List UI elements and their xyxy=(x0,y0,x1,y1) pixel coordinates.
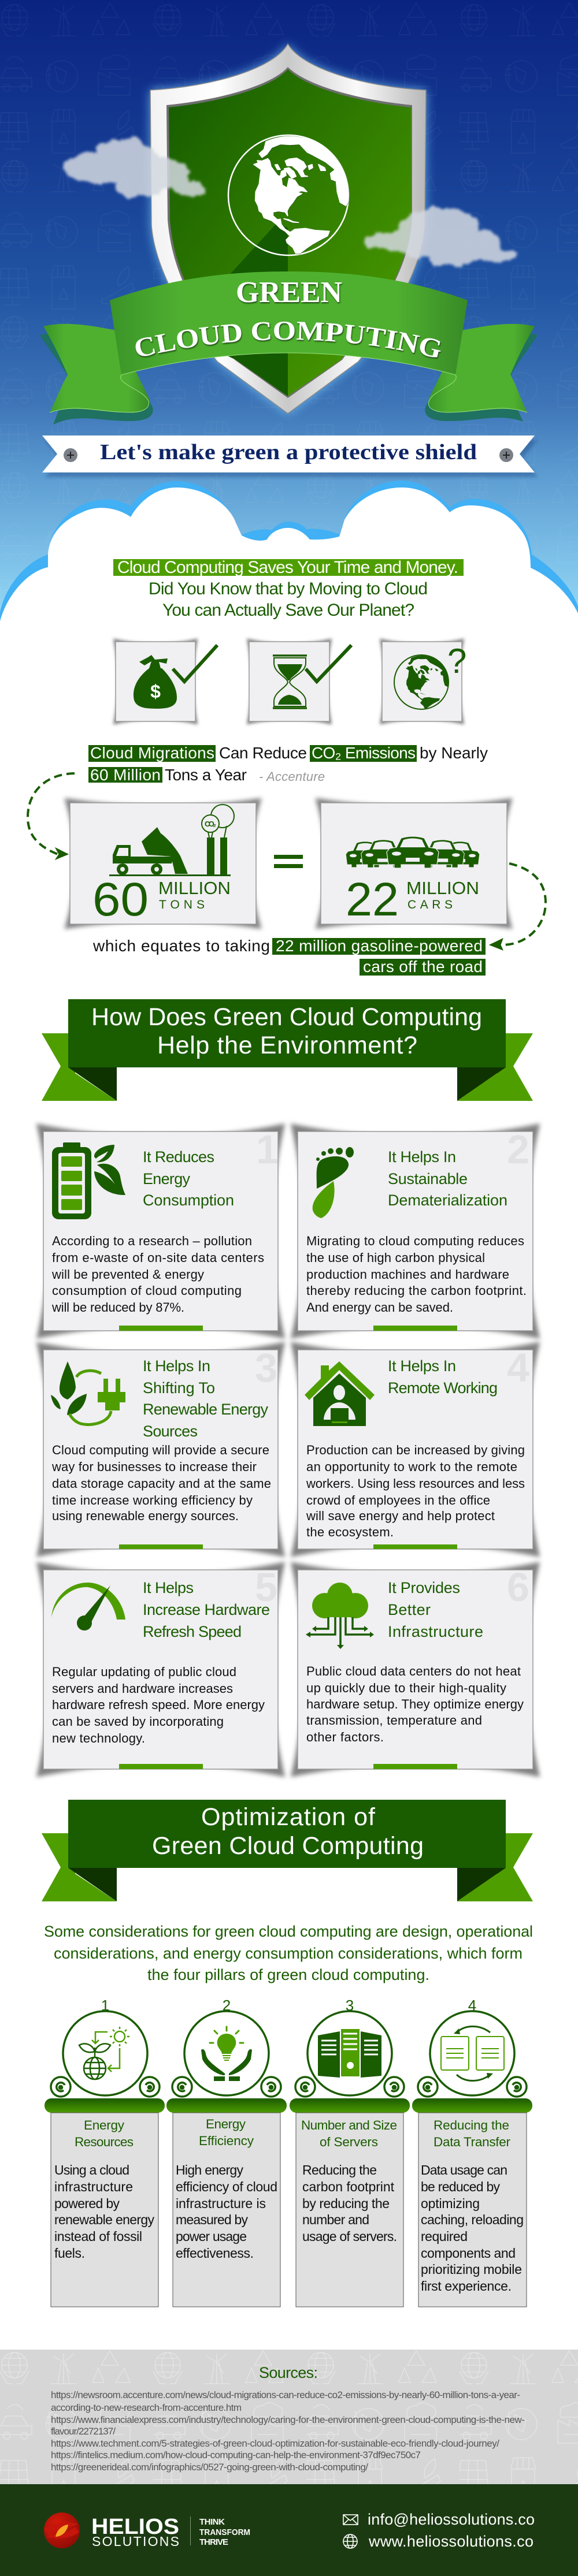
panel: card 5 xyxy=(36,1562,285,1777)
right cloud xyxy=(365,207,517,266)
pillar body: be reduced by xyxy=(421,2179,501,2194)
ribbon right tail xyxy=(425,324,538,422)
card title: It Reduces xyxy=(143,1148,214,1166)
pillar body: optimizing xyxy=(421,2196,480,2211)
pillar title xyxy=(433,2118,511,2149)
card body: data storage capacity and at the same xyxy=(52,1476,271,1491)
pillar body: prioritizing mobile xyxy=(421,2262,522,2277)
pillar 3: 3 xyxy=(346,1997,354,2014)
card body: can be saved by incorporating xyxy=(52,1714,224,1729)
icon: battery with leaves xyxy=(52,1142,125,1219)
card body: hardware refresh speed. More energy xyxy=(52,1698,265,1712)
panel: card 4 xyxy=(291,1342,540,1557)
pillar body: efficiency of cloud xyxy=(176,2179,277,2194)
stat text xyxy=(346,873,479,926)
banner text: Let's make green a protective shield xyxy=(100,440,477,464)
pillar 1: 1 xyxy=(101,1997,109,2014)
pillar body: Data usage can xyxy=(421,2162,507,2177)
intro paragraph: the four pillars of green cloud computing. xyxy=(147,1966,429,1983)
card title: Remote Working xyxy=(388,1379,498,1397)
pillar title: of Servers xyxy=(320,2135,378,2149)
ribbon left tail xyxy=(40,324,153,425)
card title xyxy=(388,1579,483,1640)
logo wordmark xyxy=(91,2515,250,2549)
card title xyxy=(143,1579,270,1640)
pillar body: number and xyxy=(302,2212,369,2227)
equates text: which equates to taking xyxy=(92,937,270,955)
icon: cars xyxy=(346,836,480,868)
card title: It Helps In xyxy=(143,1357,210,1375)
equates text: 22 million gasoline-powered xyxy=(276,937,483,955)
card title xyxy=(388,1357,498,1397)
pillar body: fuels. xyxy=(54,2246,85,2261)
panel: card 3 xyxy=(36,1342,285,1557)
card body: Public cloud data centers do not heat xyxy=(306,1664,521,1678)
panel: card 5: 5 xyxy=(255,1565,277,1610)
panel: 60 million tons xyxy=(64,798,262,929)
card title: Renewable Energy xyxy=(143,1401,268,1418)
card body: Production can be increased by giving xyxy=(306,1443,525,1457)
sources list: https://newsroom.accenture.com/news/cloud-migrations-can-reduce-co2-emissions-by-nearly-60-million-tons-a-year- xyxy=(51,2389,520,2400)
heading: optimization: Optimization of xyxy=(201,1803,376,1831)
card title: It Helps xyxy=(143,1579,194,1596)
pillar body: High energy xyxy=(176,2162,244,2177)
pillar body xyxy=(421,2162,524,2294)
icon: footprint leaf xyxy=(313,1147,354,1218)
logo wordmark: TRANSFORM xyxy=(199,2527,250,2537)
card body: According to a research – pollution xyxy=(52,1234,252,1248)
card body: consumption of cloud computing xyxy=(52,1283,242,1298)
panel: card 2 xyxy=(291,1123,540,1339)
card title: Better xyxy=(388,1601,431,1618)
pillar title: Energy xyxy=(206,2117,246,2131)
pillar title xyxy=(301,2118,397,2149)
icon: truck and smokestacks xyxy=(109,805,234,876)
stat text xyxy=(92,873,231,926)
panel: 22 million cars xyxy=(315,798,513,929)
card body: using renewable energy sources. xyxy=(52,1509,239,1523)
card title: It Provides xyxy=(388,1579,460,1596)
equates text: cars off the road xyxy=(363,958,483,976)
heading: how does green cloud computing help: How Does Green Cloud Computing xyxy=(91,1003,482,1031)
card title: Infrastructure xyxy=(388,1623,483,1640)
cloud migrations text: by Nearly xyxy=(420,744,488,762)
panel: sources xyxy=(0,2350,578,2484)
pillar body: carbon footprint xyxy=(302,2179,395,2194)
sources list: https://www.financialexpress.com/industry/technology/caring-for-the-environment-green-cloud-computing-is-the-new- xyxy=(51,2414,525,2425)
panel: money icon: $ xyxy=(150,681,161,702)
card body xyxy=(306,1664,524,1744)
panel: card 6: 6 xyxy=(507,1565,529,1610)
icon: email xyxy=(343,2515,358,2525)
card body: from e-waste of on-site data centers xyxy=(52,1250,264,1265)
pillar body: components and xyxy=(421,2246,516,2261)
card body: Migrating to cloud computing reduces xyxy=(306,1234,524,1248)
card body: will save energy and help protect xyxy=(306,1509,495,1523)
pillar body: infrastructure xyxy=(54,2179,133,2194)
card title: Energy xyxy=(143,1170,191,1188)
card body: way for businesses to increase their xyxy=(51,1460,257,1474)
card body: other factors. xyxy=(306,1730,384,1744)
sources list: https://fintelics.medium.com/how-cloud-computing-can-help-the-environment-37df9ec750c7 xyxy=(51,2450,421,2460)
card title: Shifting To xyxy=(143,1379,215,1397)
card body: servers and hardware increases xyxy=(52,1681,233,1696)
pillar title xyxy=(199,2117,254,2148)
shield xyxy=(150,44,426,414)
pillar 1 xyxy=(45,1997,165,2307)
stat text: CARS xyxy=(407,898,453,911)
pillar body xyxy=(54,2162,155,2261)
pillar title: Energy xyxy=(84,2118,125,2132)
icon: plant globe and sun xyxy=(79,2027,129,2079)
card body xyxy=(52,1665,265,1745)
card body: thereby reducing the carbon footprint. xyxy=(306,1283,527,1298)
card title: Sources xyxy=(143,1423,198,1440)
cloud migrations text: Tons a Year xyxy=(165,766,247,784)
pillar title: Reducing the xyxy=(433,2118,509,2132)
icon: cloud infrastructure xyxy=(306,1583,374,1649)
cloud migrations text: Can Reduce xyxy=(219,744,307,762)
card body: the use of high carbon physical xyxy=(306,1250,485,1265)
arrow: to 60 million box xyxy=(28,773,75,859)
pillar title: Number and Size xyxy=(301,2118,397,2132)
pillar title: Resources xyxy=(75,2135,134,2149)
icon: truck and smokestacks: CO₂ xyxy=(205,820,216,828)
left cloud xyxy=(64,139,204,198)
panel: planet question icon: ? xyxy=(447,642,466,680)
pillar body: instead of fossil xyxy=(54,2229,142,2244)
pillar body: required xyxy=(421,2229,468,2244)
pillar body: by reducing the xyxy=(302,2196,390,2211)
panel: hourglass icon xyxy=(247,638,351,725)
card title: Increase Hardware xyxy=(143,1601,270,1618)
cloud migrations text: CO₂ Emissions xyxy=(312,744,416,762)
card body: And energy can be saved. xyxy=(306,1300,453,1315)
logo wordmark: HELIOS xyxy=(91,2515,179,2539)
card body: workers. Using less resources and less xyxy=(306,1476,525,1491)
pillar body: first experience. xyxy=(421,2279,512,2294)
intro text: Did You Know that by Moving to Cloud xyxy=(149,579,428,598)
sources list: https://greenerideal.com/infographics/0527-going-green-with-cloud-computing/ xyxy=(51,2462,368,2473)
pillar body: renewable energy xyxy=(54,2212,155,2227)
icon: hands and light bulb xyxy=(201,2027,252,2081)
pillar 4: 4 xyxy=(468,1997,476,2014)
icon: screw left xyxy=(64,448,77,462)
card body: crowd of employees in the office xyxy=(306,1493,490,1507)
panel: card 1: 1 xyxy=(256,1127,279,1172)
card body xyxy=(51,1234,264,1315)
hero sky background xyxy=(0,0,578,635)
intro paragraph: Some considerations for green cloud computing are design, operational xyxy=(44,1923,533,1940)
footer xyxy=(0,2484,578,2576)
pillar body xyxy=(176,2162,277,2261)
sources list: flavour/2272137/ xyxy=(51,2426,116,2437)
stat text: 60 xyxy=(92,873,149,926)
card body: up quickly due to their high-quality xyxy=(306,1681,506,1695)
card title: It Helps In xyxy=(388,1357,456,1375)
cloud migrations text: Cloud Migrations xyxy=(90,744,214,762)
intro text: Cloud Computing Saves Your Time and Money. xyxy=(117,558,458,577)
card title: Dematerialization xyxy=(388,1192,507,1209)
cloud migrations text xyxy=(88,744,488,784)
email address: info@heliossolutions.co xyxy=(368,2511,535,2528)
intro text: You can Actually Save Our Planet? xyxy=(162,601,414,620)
pillar body: power usage xyxy=(176,2229,247,2244)
card body: Cloud computing will provide a secure xyxy=(52,1443,269,1457)
intro paragraph: considerations, and energy consumption considerations, which form xyxy=(54,1945,523,1962)
heading: how does green cloud computing help: Help the Environment? xyxy=(157,1032,417,1059)
panel: money icon xyxy=(113,638,217,725)
pillar body: effectiveness. xyxy=(176,2246,254,2261)
pillar body xyxy=(302,2162,397,2244)
main ribbon xyxy=(50,271,527,412)
pillar title: Efficiency xyxy=(199,2134,254,2148)
card title xyxy=(388,1148,507,1209)
icon: remote work house xyxy=(305,1361,375,1426)
card body: transmission, temperature and xyxy=(306,1713,482,1728)
pillar body: infrastructure is xyxy=(176,2196,266,2211)
panel: card 3: 3 xyxy=(255,1345,277,1390)
card body: hardware setup. They optimize energy xyxy=(306,1697,524,1711)
card title: Refresh Speed xyxy=(143,1623,242,1640)
card body: Regular updating of public cloud xyxy=(52,1665,236,1679)
card body: will be reduced by 87%. xyxy=(51,1300,184,1315)
logo wordmark: THRIVE xyxy=(199,2537,228,2547)
stat text: 22 xyxy=(346,873,399,926)
icon: renewable plug xyxy=(51,1361,125,1424)
logo wordmark: THINK xyxy=(199,2517,225,2527)
intro paragraph xyxy=(44,1923,533,1983)
panel: card 6 xyxy=(291,1562,540,1777)
panel: planet question icon xyxy=(380,638,466,725)
panel: card 4: 4 xyxy=(507,1345,529,1390)
panel: card 1 xyxy=(36,1123,285,1339)
equates text xyxy=(92,937,486,976)
stat text: TONS xyxy=(159,898,205,911)
pillar title xyxy=(75,2118,134,2149)
cloud shape: outline layer and white body xyxy=(0,481,578,693)
card body: the ecosystem. xyxy=(306,1525,394,1539)
title xyxy=(135,276,442,359)
pillar 2 xyxy=(166,1997,287,2307)
heading: how does green cloud computing help xyxy=(42,999,533,1101)
tagline banner xyxy=(42,435,538,477)
pillar body: powered by xyxy=(54,2196,120,2211)
logo mark xyxy=(44,2512,80,2548)
intro text xyxy=(113,558,464,620)
card body xyxy=(306,1234,527,1315)
icon: web globe xyxy=(343,2534,357,2548)
card title xyxy=(143,1357,268,1440)
icon: servers xyxy=(318,2029,381,2078)
panel: card 2: 2 xyxy=(507,1127,529,1172)
pillar 4 xyxy=(412,1997,532,2307)
title: CLOUD COMPUTING xyxy=(135,321,442,359)
heading: optimization xyxy=(42,1800,533,1901)
cloud migrations text: - Accenture xyxy=(259,769,325,784)
arrow: to gasoline text xyxy=(490,863,546,950)
card title: It Helps In xyxy=(388,1148,456,1166)
equals sign xyxy=(274,855,303,868)
card body: will be prevented & energy xyxy=(51,1267,204,1282)
sources list xyxy=(51,2389,525,2473)
stat text: MILLION xyxy=(158,878,231,898)
globe emblem xyxy=(228,135,349,255)
pillar body: Using a cloud xyxy=(54,2162,129,2177)
card body: an opportunity to work to the remote xyxy=(306,1460,517,1474)
pillar body: usage of servers. xyxy=(302,2229,397,2244)
title: GREEN xyxy=(236,276,342,309)
card body xyxy=(306,1443,525,1539)
icon: screw right xyxy=(499,448,513,462)
card body xyxy=(51,1443,271,1523)
pillar 3 xyxy=(290,1997,410,2307)
website address: www.heliossolutions.co xyxy=(368,2533,533,2550)
card body: new technology. xyxy=(52,1731,145,1745)
card body: production machines and hardware xyxy=(306,1267,509,1282)
pillar body: caching, reloading xyxy=(421,2212,524,2227)
sources heading: Sources: xyxy=(259,2364,318,2381)
icon: gauge xyxy=(51,1583,125,1631)
card title: Consumption xyxy=(143,1192,234,1209)
sources list: according-to-new-research-from-accenture.htm xyxy=(51,2402,242,2413)
cloud migrations text: 60 Million xyxy=(90,766,161,784)
pillar body: measured by xyxy=(176,2212,249,2227)
pillar body: Reducing the xyxy=(302,2162,377,2177)
logo wordmark: SOLUTIONS xyxy=(92,2534,179,2549)
stat text: MILLION xyxy=(406,878,479,898)
pillar title: Data Transfer xyxy=(433,2135,511,2149)
sources list: https://www.techment.com/5-strategies-of-green-cloud-optimization-for-sustainable-eco-friendly-cloud-journey/ xyxy=(51,2438,499,2449)
card title xyxy=(143,1148,234,1209)
pillar 2: 2 xyxy=(223,1997,231,2014)
heading: optimization: Green Cloud Computing xyxy=(152,1832,424,1860)
card body: time increase working efficiency by xyxy=(52,1493,253,1507)
icon: data transfer documents xyxy=(441,2026,504,2080)
card title: Sustainable xyxy=(388,1170,468,1188)
